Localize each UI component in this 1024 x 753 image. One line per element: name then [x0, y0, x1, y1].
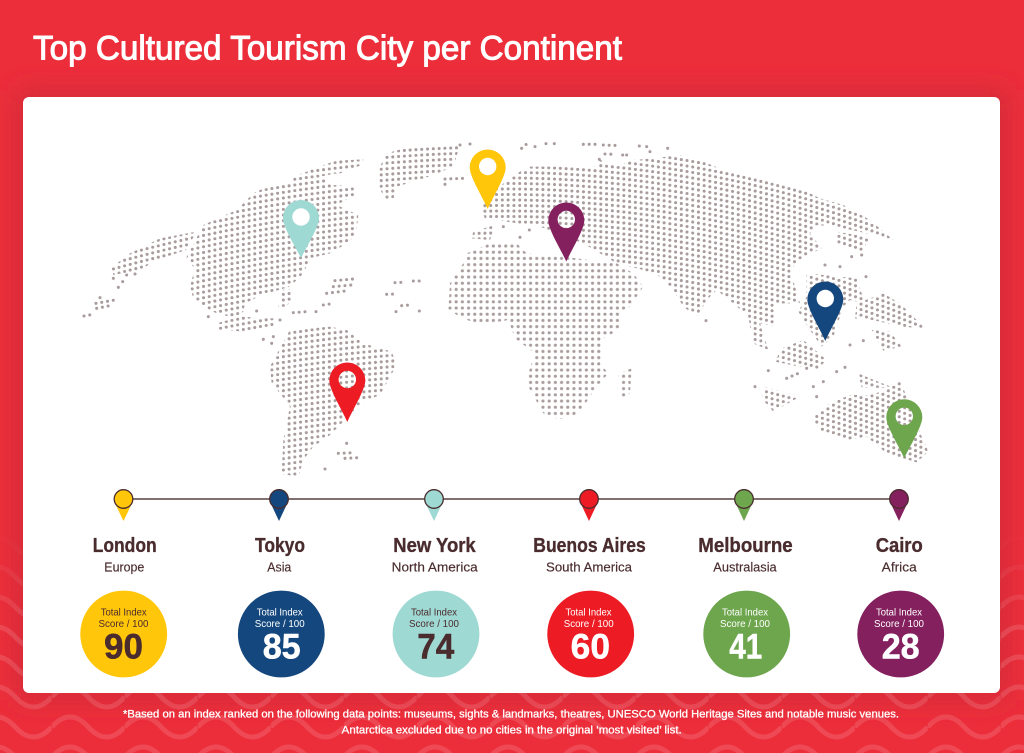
city: Tokyo: Tokyo: [255, 534, 305, 557]
score circle: 28: Total Index: [876, 607, 923, 619]
column: Tokyo: [238, 490, 325, 677]
column: Melbourne: [698, 490, 793, 677]
city: Cairo: Cairo: [876, 534, 923, 557]
score circle: 74: 74: [417, 627, 455, 666]
marker: New York: [425, 490, 443, 521]
score circle: 74: [393, 591, 479, 677]
footnote: [123, 708, 899, 736]
score circle: 85: Total Index: [257, 607, 303, 619]
continent: North America: North America: [392, 560, 478, 574]
scattered islands east: [503, 143, 866, 397]
column: Cairo: [857, 490, 944, 677]
continent: Africa: Africa: [882, 560, 917, 574]
score circle: 28: 28: [882, 627, 920, 666]
city: New York: New York: [393, 534, 476, 557]
title: Top Cultured Tourism City per Continent: [33, 30, 622, 68]
score circle: 60: 60: [571, 627, 610, 666]
pin: Tokyo: [807, 282, 843, 341]
score circle: 60: [547, 591, 634, 677]
dotted world map: [82, 142, 928, 476]
column: New York: [392, 490, 479, 677]
panel: white card: [23, 97, 1000, 693]
continent: Europe: Europe: [104, 560, 144, 574]
score circle: 41: [703, 591, 790, 677]
score circle: 90: [80, 591, 167, 677]
score circle: 41: Score / 100: [720, 618, 770, 630]
score circle: 28: [857, 591, 944, 677]
pin: London: [470, 150, 506, 209]
footnote: *Based on an index ranked on the following data points: museums, sights & landmarks, theatres, UNESCO World Heritage Sites and notable music venues.: [123, 708, 899, 720]
footnote: Antarctica excluded due to no cities in the original ‘most visited’ list.: [342, 724, 682, 736]
pin: Melbourne: [886, 399, 922, 458]
marker: Melbourne: [735, 490, 753, 521]
score circle: 60: Score / 100: [564, 618, 614, 630]
column: Buenos Aires: [533, 490, 646, 677]
map: Americas and Greenland: [80, 142, 513, 522]
timeline connector: [123, 498, 899, 500]
Eurasia dots: [472, 155, 894, 350]
score circle: 85: 85: [263, 627, 301, 666]
continent: Australasia: Australasia: [713, 560, 777, 574]
score circle: 41: 41: [729, 627, 762, 666]
score circle: 28: Score / 100: [874, 618, 924, 630]
South America dots: [270, 326, 394, 476]
score circle: 90: Score / 100: [98, 618, 149, 630]
Greenland dots: [380, 146, 458, 199]
Africa dots: [448, 243, 643, 419]
marker: Tokyo: [270, 490, 288, 521]
map pins: [283, 150, 922, 458]
continent: Asia: Asia: [267, 560, 291, 574]
pin: Cairo: [548, 202, 584, 262]
marker: Cairo: [890, 490, 908, 521]
score circle: 90: Total Index: [101, 607, 147, 619]
continent: South America: South America: [546, 560, 632, 574]
column: London: [80, 490, 167, 677]
score circle: 74: Score / 100: [409, 618, 459, 630]
pin: New York: [283, 200, 319, 258]
score circle: 85: [238, 591, 325, 677]
scattered islands west: [84, 144, 470, 469]
Madagascar dots: [618, 368, 632, 398]
score circle: 60: Total Index: [566, 607, 612, 619]
marker: Buenos Aires: [580, 490, 598, 521]
map: Africa, Eurasia and Oceania: [448, 139, 940, 471]
North America dots: [112, 160, 364, 332]
Australia dots: [812, 382, 928, 462]
score circle: 41: Total Index: [722, 607, 769, 619]
score circle: 85: Score / 100: [255, 618, 305, 630]
city: Melbourne: Melbourne: [698, 534, 793, 557]
score circle: 74: Total Index: [411, 607, 458, 619]
pin: Buenos Aires: [329, 362, 365, 422]
marker: London: [114, 490, 133, 521]
city: London: London: [93, 534, 157, 557]
score circle: 90: 90: [104, 627, 143, 666]
city: Buenos Aires: Buenos Aires: [533, 534, 646, 557]
Japan and Southeast Asia islands dots: [762, 294, 925, 411]
